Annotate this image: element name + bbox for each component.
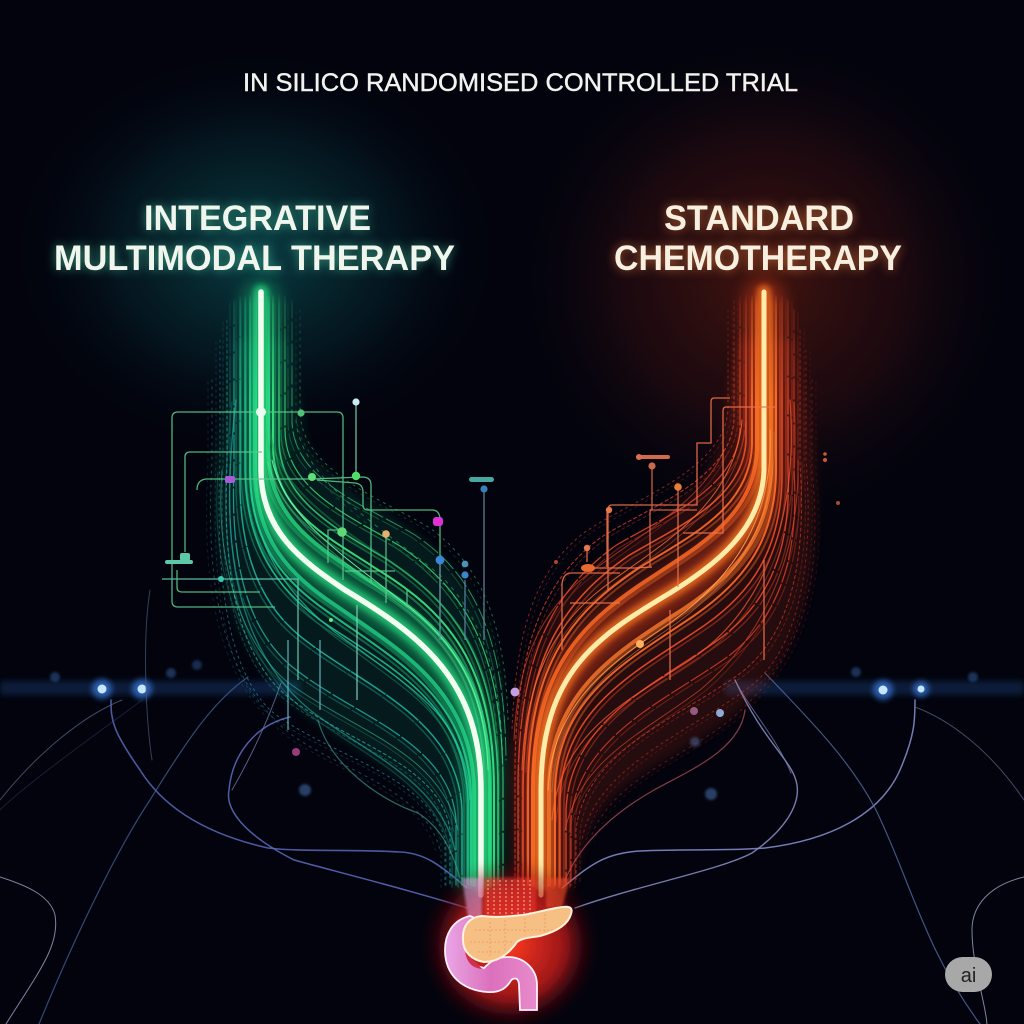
right flow main line: [541, 292, 764, 885]
left circuit diagram: [162, 403, 484, 730]
thin network curves: [0, 590, 1024, 1024]
heading: integrative multimodal therapy: MULTIMODAL THERAPY: [54, 238, 455, 278]
right therapy flow: standard chemotherapy: [508, 292, 819, 895]
left flow halo: [261, 300, 481, 885]
strands entering organ: [462, 878, 570, 918]
heading: standard chemotherapy: [614, 198, 902, 278]
heading: standard chemotherapy: STANDARD: [664, 198, 854, 238]
badge: ai watermark: [945, 957, 992, 992]
heading: integrative multimodal therapy: INTEGRATIVE: [144, 198, 371, 238]
background glow: left teal: [5, 45, 505, 455]
background glow: right red: [500, 20, 1024, 540]
duodenum: [445, 916, 537, 1010]
pancreas organ: [422, 859, 598, 1024]
left flow main line: [261, 292, 481, 885]
organ glow: [422, 859, 598, 1024]
right flow core: [541, 292, 764, 895]
inner duodenum shading: [465, 945, 482, 969]
left flow strands: [211, 294, 508, 885]
title: IN SILICO RANDOMISED CONTROLLED TRIAL: [243, 69, 798, 97]
right flow strands: [512, 294, 815, 885]
left flow extra strands: [207, 296, 504, 887]
badge: ai watermark: ai: [961, 965, 976, 987]
pancreas body: [463, 907, 572, 962]
right flow body tint: [508, 340, 816, 890]
left circuit nodes: [165, 398, 494, 622]
left flow body tint: [214, 340, 506, 885]
right circuit nodes: [510, 452, 840, 696]
heading: standard chemotherapy: CHEMOTHERAPY: [614, 238, 902, 278]
heading: integrative multimodal therapy: [54, 198, 455, 278]
right flow halo: [541, 300, 764, 885]
pancreas texture: [470, 914, 555, 958]
horizon band with light nodes: [0, 660, 1024, 800]
left flow core: [261, 292, 481, 895]
left therapy flow: integrative multimodal: [207, 292, 508, 895]
right circuit diagram: [562, 398, 775, 680]
right flow extra strands: [516, 296, 819, 887]
